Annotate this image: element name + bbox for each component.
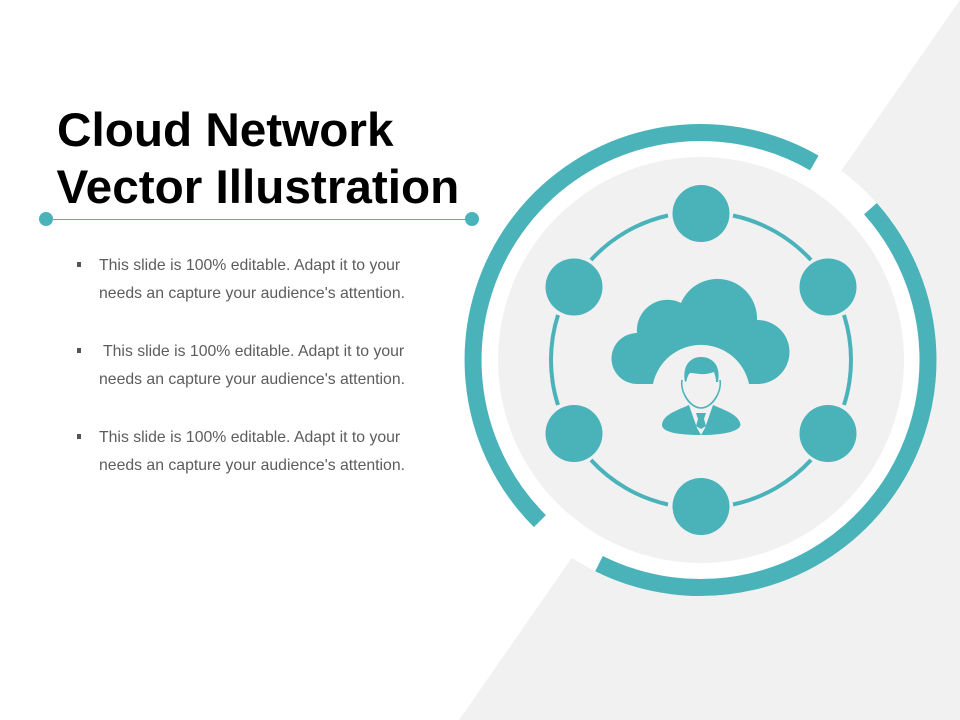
white disc behind ring	[464, 124, 936, 596]
title: Vector Illustration	[56, 161, 459, 214]
title divider with end dots	[39, 212, 479, 226]
bullet 1	[77, 257, 405, 302]
bullet 1: needs an capture your audience's attention.	[99, 285, 405, 302]
bullet 1: This slide is 100% editable. Adapt it to your	[99, 257, 400, 274]
bullet text block	[77, 257, 405, 474]
network nodes	[546, 185, 856, 535]
outer segmented ring	[473, 133, 928, 587]
inner gray disc	[498, 157, 904, 563]
icon: cloud	[612, 279, 789, 384]
tie	[696, 413, 706, 429]
bullet 2: This slide is 100% editable. Adapt it to your	[103, 343, 404, 360]
bullet 3: This slide is 100% editable. Adapt it to your	[99, 429, 400, 446]
bullet 2	[77, 343, 405, 388]
face	[682, 380, 720, 408]
icon: businessman	[662, 357, 741, 435]
bullet 2: needs an capture your audience's attention.	[99, 371, 405, 388]
background diagonal panel	[459, 0, 960, 720]
bullet 3	[77, 429, 405, 474]
body	[662, 405, 741, 435]
network ring arcs	[551, 216, 851, 504]
title: Cloud Network	[57, 104, 394, 157]
title	[56, 104, 459, 214]
bullet 3: needs an capture your audience's attention.	[99, 457, 405, 474]
hair	[684, 357, 719, 382]
